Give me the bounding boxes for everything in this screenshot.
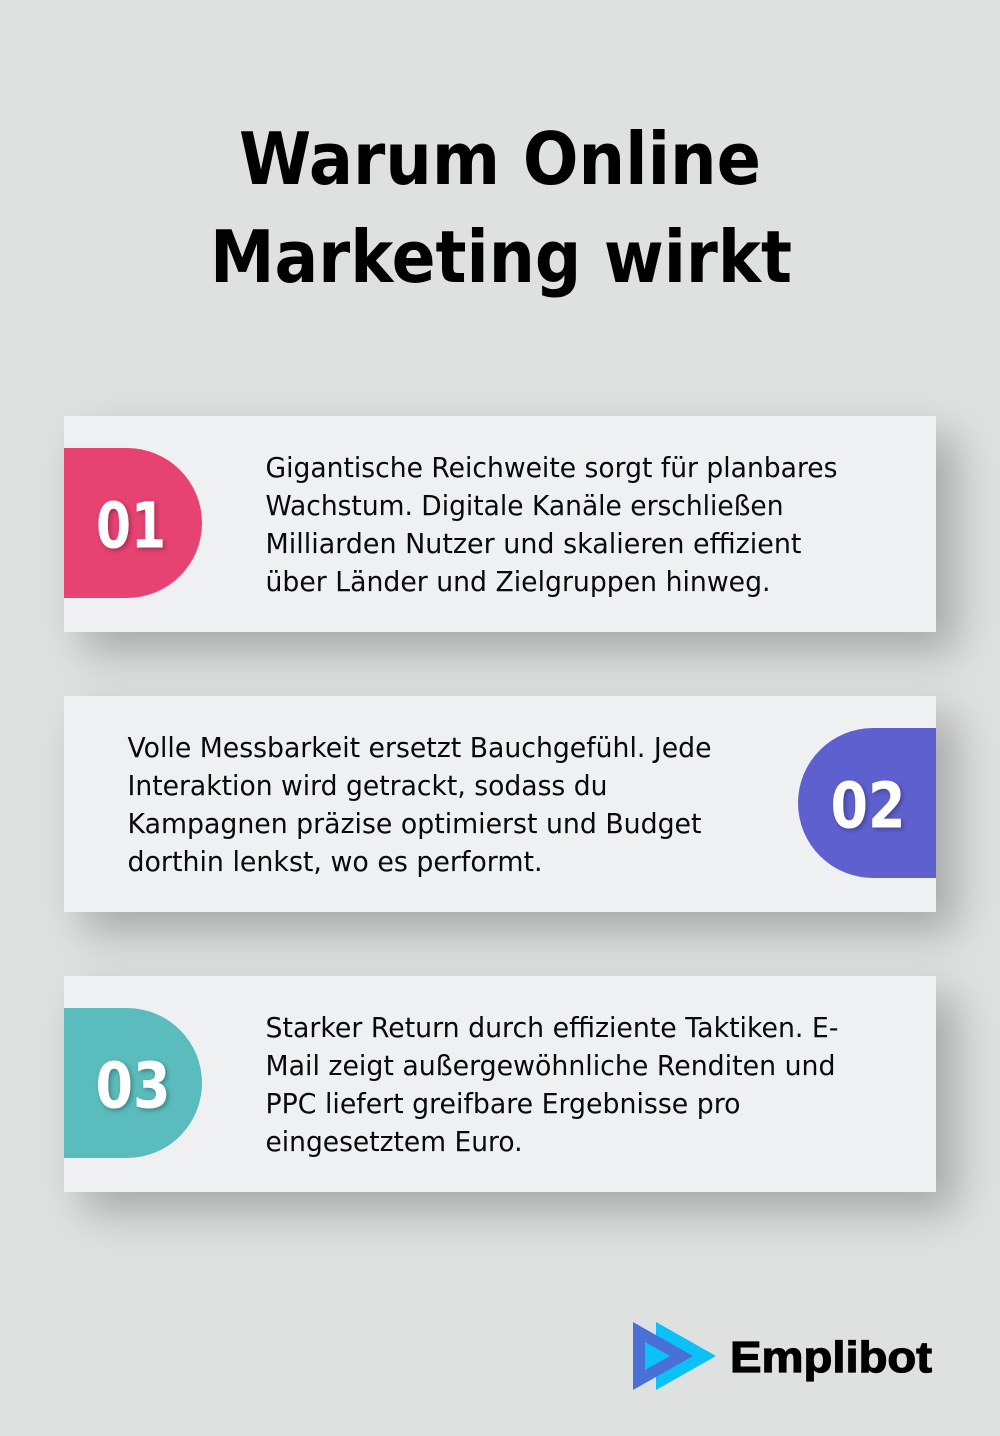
text block: card 2: Volle Messbarkeit ersetzt Bauchgefühl. Jede bbox=[128, 731, 712, 764]
text block: card 3: Starker Return durch effiziente Taktiken. E- bbox=[266, 1011, 838, 1044]
text block: card 3: eingesetztem Euro. bbox=[266, 1125, 522, 1158]
text block: card 1: Gigantische Reichweite sorgt für planbares bbox=[266, 451, 838, 484]
badge: 02: 02 bbox=[830, 770, 906, 842]
panel: card 2 background bbox=[64, 696, 936, 912]
text block: card 3: PPC liefert greifbare Ergebnisse pro bbox=[266, 1087, 740, 1120]
text block: card 2: Interaktion wird getrackt, sodass du bbox=[128, 769, 608, 802]
title: Marketing wirkt bbox=[210, 215, 792, 299]
badge: 03 bbox=[64, 1008, 202, 1158]
title: Warum Online bbox=[239, 117, 761, 201]
panel: card 3 background bbox=[64, 976, 936, 1192]
text block: card 1: Wachstum. Digitale Kanäle erschließen bbox=[266, 489, 784, 522]
text block: card 1: über Länder und Zielgruppen hinweg. bbox=[266, 565, 770, 598]
text block: card 2 bbox=[128, 731, 712, 878]
icon: play triangles bbox=[633, 1322, 716, 1390]
panel: card 1 background bbox=[64, 416, 936, 632]
badge: 01: 01 bbox=[96, 490, 166, 562]
badge: 01 bbox=[64, 448, 202, 598]
text block: card 1 bbox=[266, 451, 838, 598]
text block: card 3 bbox=[266, 1011, 838, 1158]
badge: 02 bbox=[798, 728, 936, 878]
text block: card 2: dorthin lenkst, wo es performt. bbox=[128, 845, 542, 878]
logo wordmark: Emplibot bbox=[730, 1333, 932, 1382]
logo: Emplibot bbox=[633, 1322, 932, 1390]
badge: 03: 03 bbox=[96, 1050, 170, 1122]
text block: card 3: Mail zeigt außergewöhnliche Renditen und bbox=[266, 1049, 836, 1082]
text block: card 2: Kampagnen präzise optimierst und Budget bbox=[128, 807, 702, 840]
title bbox=[210, 117, 792, 299]
text block: card 1: Milliarden Nutzer und skalieren effizient bbox=[266, 527, 802, 560]
